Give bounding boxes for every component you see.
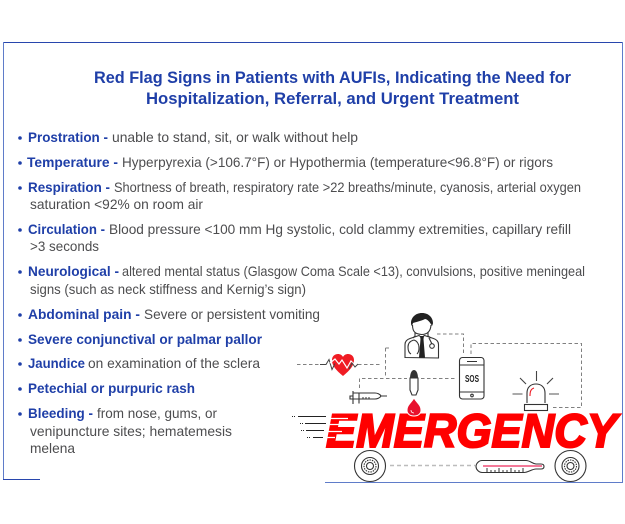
item: neurological xyxy=(18,264,585,297)
item: circulation xyxy=(18,222,571,254)
title: Hospitalization, Referral, and Urgent Treatment xyxy=(146,90,520,108)
emergency illustration xyxy=(292,313,620,482)
item: respiration: Respiration - xyxy=(28,180,110,195)
item: bleeding: from nose, gums, or xyxy=(97,406,217,421)
item: pallor: Severe conjunctival or palmar pallor xyxy=(28,332,263,347)
item: prostration: Prostration - xyxy=(28,130,108,145)
icon: doctor xyxy=(405,313,438,358)
item: bleeding: Bleeding - xyxy=(28,406,93,421)
item: respiration: Shortness of breath, respiratory rate >22 breaths/minute, cyanosis, arterial oxygen xyxy=(114,180,581,195)
item: jaundice: Jaundice xyxy=(28,356,85,371)
item: respiration xyxy=(18,180,581,212)
icon: heart with pulse xyxy=(320,354,358,376)
icon: phone SOS: SOS xyxy=(465,374,479,385)
icon: syringe xyxy=(350,391,387,404)
speed lines xyxy=(292,416,326,438)
item: abdominal pain: Severe or persistent vomiting xyxy=(144,307,320,322)
item: circulation: Blood pressure <100 mm Hg systolic, cold clammy extremities, capillary refill xyxy=(109,222,571,237)
EMERGENCY wordmark: EMERGENCY xyxy=(326,404,620,457)
icon: left wheel xyxy=(354,450,386,482)
item: bleeding: melena xyxy=(30,441,75,456)
icon: blood drop xyxy=(407,398,421,416)
item: temperature: Hyperpyrexia (>106.7°F) or Hypothermia (temperature<96.8°F) or rigors xyxy=(122,155,553,170)
bullet list xyxy=(18,130,585,456)
item: respiration: saturation <92% on room air xyxy=(30,197,203,212)
item: jaundice: on examination of the sclera xyxy=(88,356,260,371)
icon: right wheel xyxy=(555,450,586,482)
item: prostration: unable to stand, sit, or walk without help xyxy=(112,130,358,145)
item: rash: Petechial or purpuric rash xyxy=(28,381,195,396)
icon: dropper xyxy=(410,370,418,395)
item: neurological: signs (such as neck stiffness and Kernig’s sign) xyxy=(30,282,306,297)
dashed connectors xyxy=(297,334,582,466)
item: neurological: altered mental status (Glasgow Coma Scale <13), convulsions, positive meningeal xyxy=(122,264,585,279)
title: Red Flag Signs in Patients with AUFIs, Indicating the Need for xyxy=(94,69,572,87)
icon: siren xyxy=(512,371,559,410)
item: abdominal pain xyxy=(18,307,320,322)
item: neurological: Neurological - xyxy=(28,264,119,279)
icon: thermometer xyxy=(476,460,544,472)
item: circulation: Circulation - xyxy=(28,222,105,237)
icon: phone SOS xyxy=(460,358,484,399)
item: temperature: Temperature - xyxy=(27,155,118,170)
title xyxy=(94,69,572,108)
item: bleeding xyxy=(18,406,232,456)
item: bleeding: venipuncture sites; hematemesis xyxy=(30,424,232,439)
item: circulation: >3 seconds xyxy=(30,239,99,254)
item: abdominal pain: Abdominal pain - xyxy=(28,307,140,322)
